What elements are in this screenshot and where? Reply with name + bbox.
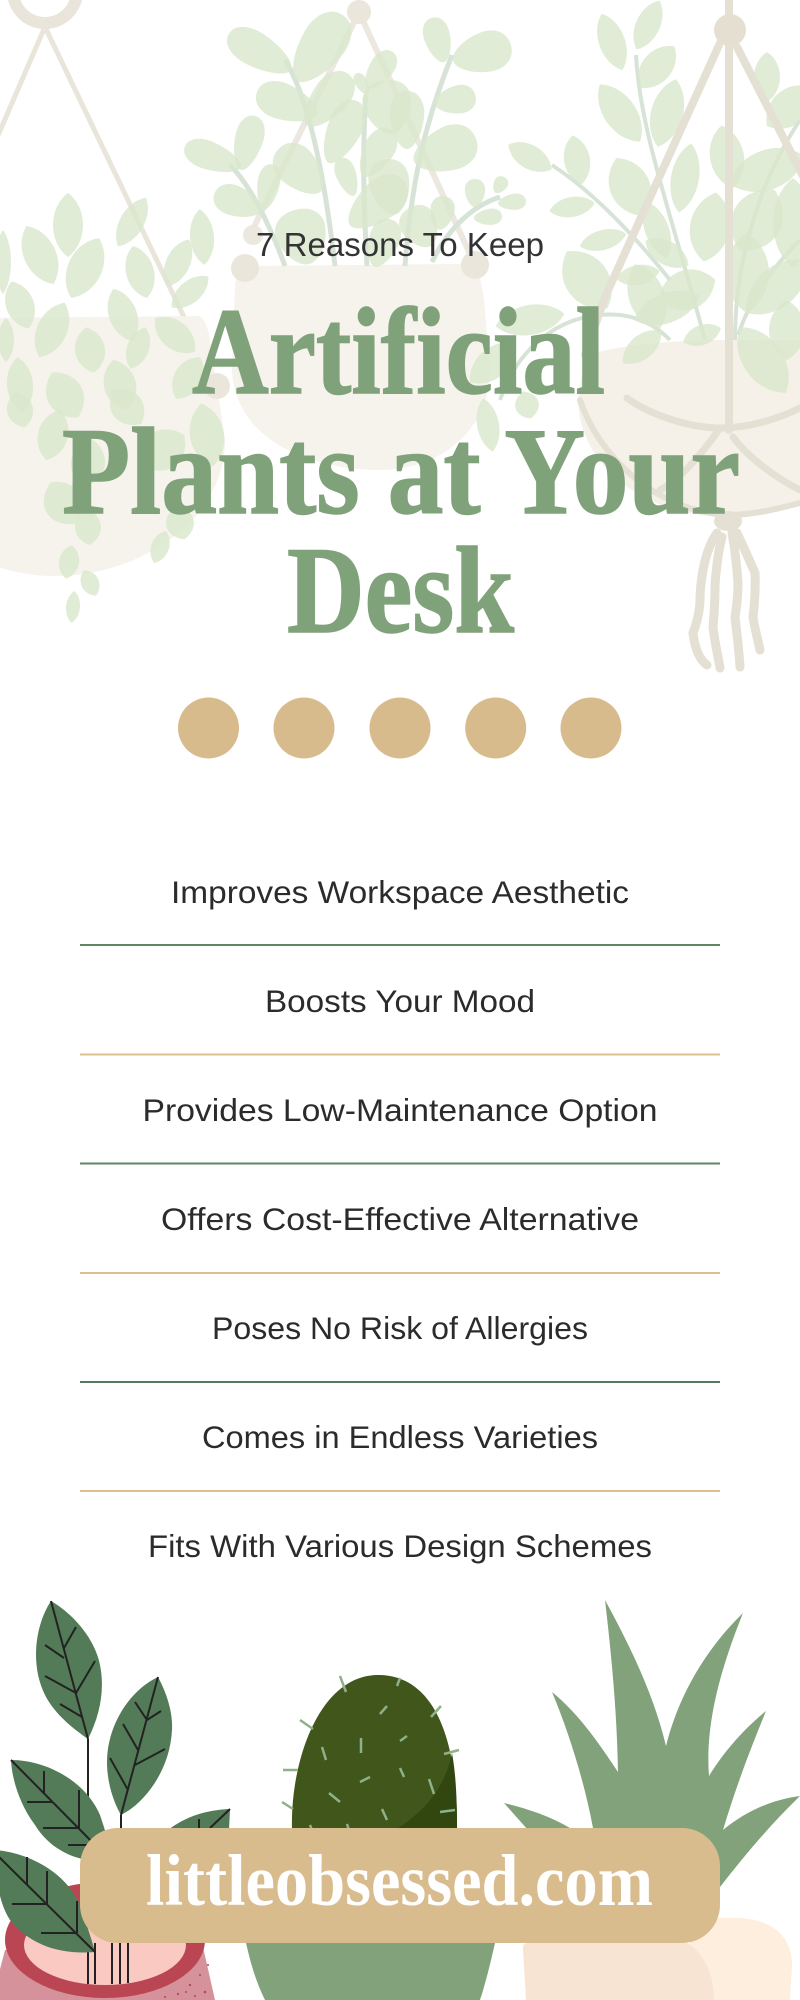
illustration: aloe in peach pots bbox=[504, 1600, 800, 2000]
aloe leaves bbox=[552, 1600, 800, 1887]
left foliage bbox=[0, 192, 229, 624]
pot rim bbox=[5, 1882, 205, 1998]
back pot bbox=[690, 1918, 792, 2000]
leaves over bowl and title area bbox=[460, 299, 800, 453]
right bowl bbox=[578, 340, 800, 516]
centre foliage bbox=[180, 2, 527, 272]
reason 3: Provides Low-Maintenance Option bbox=[142, 1092, 658, 1128]
illustration: pink pot with leafy plant bbox=[0, 1601, 230, 2000]
illustration: centre hanging planter bbox=[180, 0, 527, 470]
website text: littleobsessed.com bbox=[146, 1840, 653, 1921]
right strings and netting bbox=[580, 0, 800, 668]
reason 5: Poses No Risk of Allergies bbox=[212, 1310, 588, 1346]
plant stems bbox=[88, 1739, 128, 1984]
list of seven reasons bbox=[80, 874, 720, 1564]
illustration: right hanging planter bbox=[460, 0, 800, 668]
right foliage bbox=[502, 0, 800, 336]
right stems bbox=[500, 55, 800, 400]
reason 2: Boosts Your Mood bbox=[265, 983, 535, 1019]
cactus shadow bbox=[395, 1753, 457, 1830]
title line 3: Desk bbox=[287, 522, 514, 659]
cactus spines bbox=[282, 1676, 459, 1830]
centre stems bbox=[230, 55, 500, 266]
reason 6: Comes in Endless Varieties bbox=[202, 1419, 598, 1455]
row of five dots bbox=[178, 698, 622, 758]
website banner bbox=[80, 1828, 720, 1943]
title bbox=[62, 283, 740, 659]
front pot bbox=[523, 1943, 714, 2000]
left pot bbox=[0, 316, 225, 576]
tassel knot bbox=[714, 511, 742, 531]
leaf 3 bbox=[11, 1760, 112, 1861]
reason 7: Fits With Various Design Schemes bbox=[148, 1528, 652, 1564]
title line 2: Plants at Your bbox=[62, 403, 740, 540]
reason 4: Offers Cost-Effective Alternative bbox=[161, 1201, 639, 1237]
centre pot bbox=[232, 264, 490, 470]
reason 1: Improves Workspace Aesthetic bbox=[171, 874, 629, 910]
small aloe leaf bbox=[504, 1803, 570, 1830]
illustration: left hanging planter bbox=[0, 0, 230, 624]
pot speckles bbox=[164, 1964, 209, 1998]
illustration: cactus in green pot bbox=[240, 1675, 500, 2000]
title line 1: Artificial bbox=[192, 283, 605, 420]
pot inner bbox=[24, 1905, 186, 1985]
subtitle: 7 Reasons To Keep bbox=[256, 226, 544, 263]
centre strings and beads bbox=[250, 12, 475, 265]
leaf 5 bbox=[168, 1809, 230, 1830]
leaf 2 bbox=[107, 1677, 172, 1815]
green pot bbox=[240, 1920, 500, 2000]
leaf 4 bbox=[0, 1850, 95, 1953]
leaf 1 bbox=[36, 1601, 102, 1739]
hanger ring and strings bbox=[0, 0, 217, 386]
cactus body bbox=[292, 1675, 457, 1830]
pink pot body bbox=[0, 1947, 215, 2000]
